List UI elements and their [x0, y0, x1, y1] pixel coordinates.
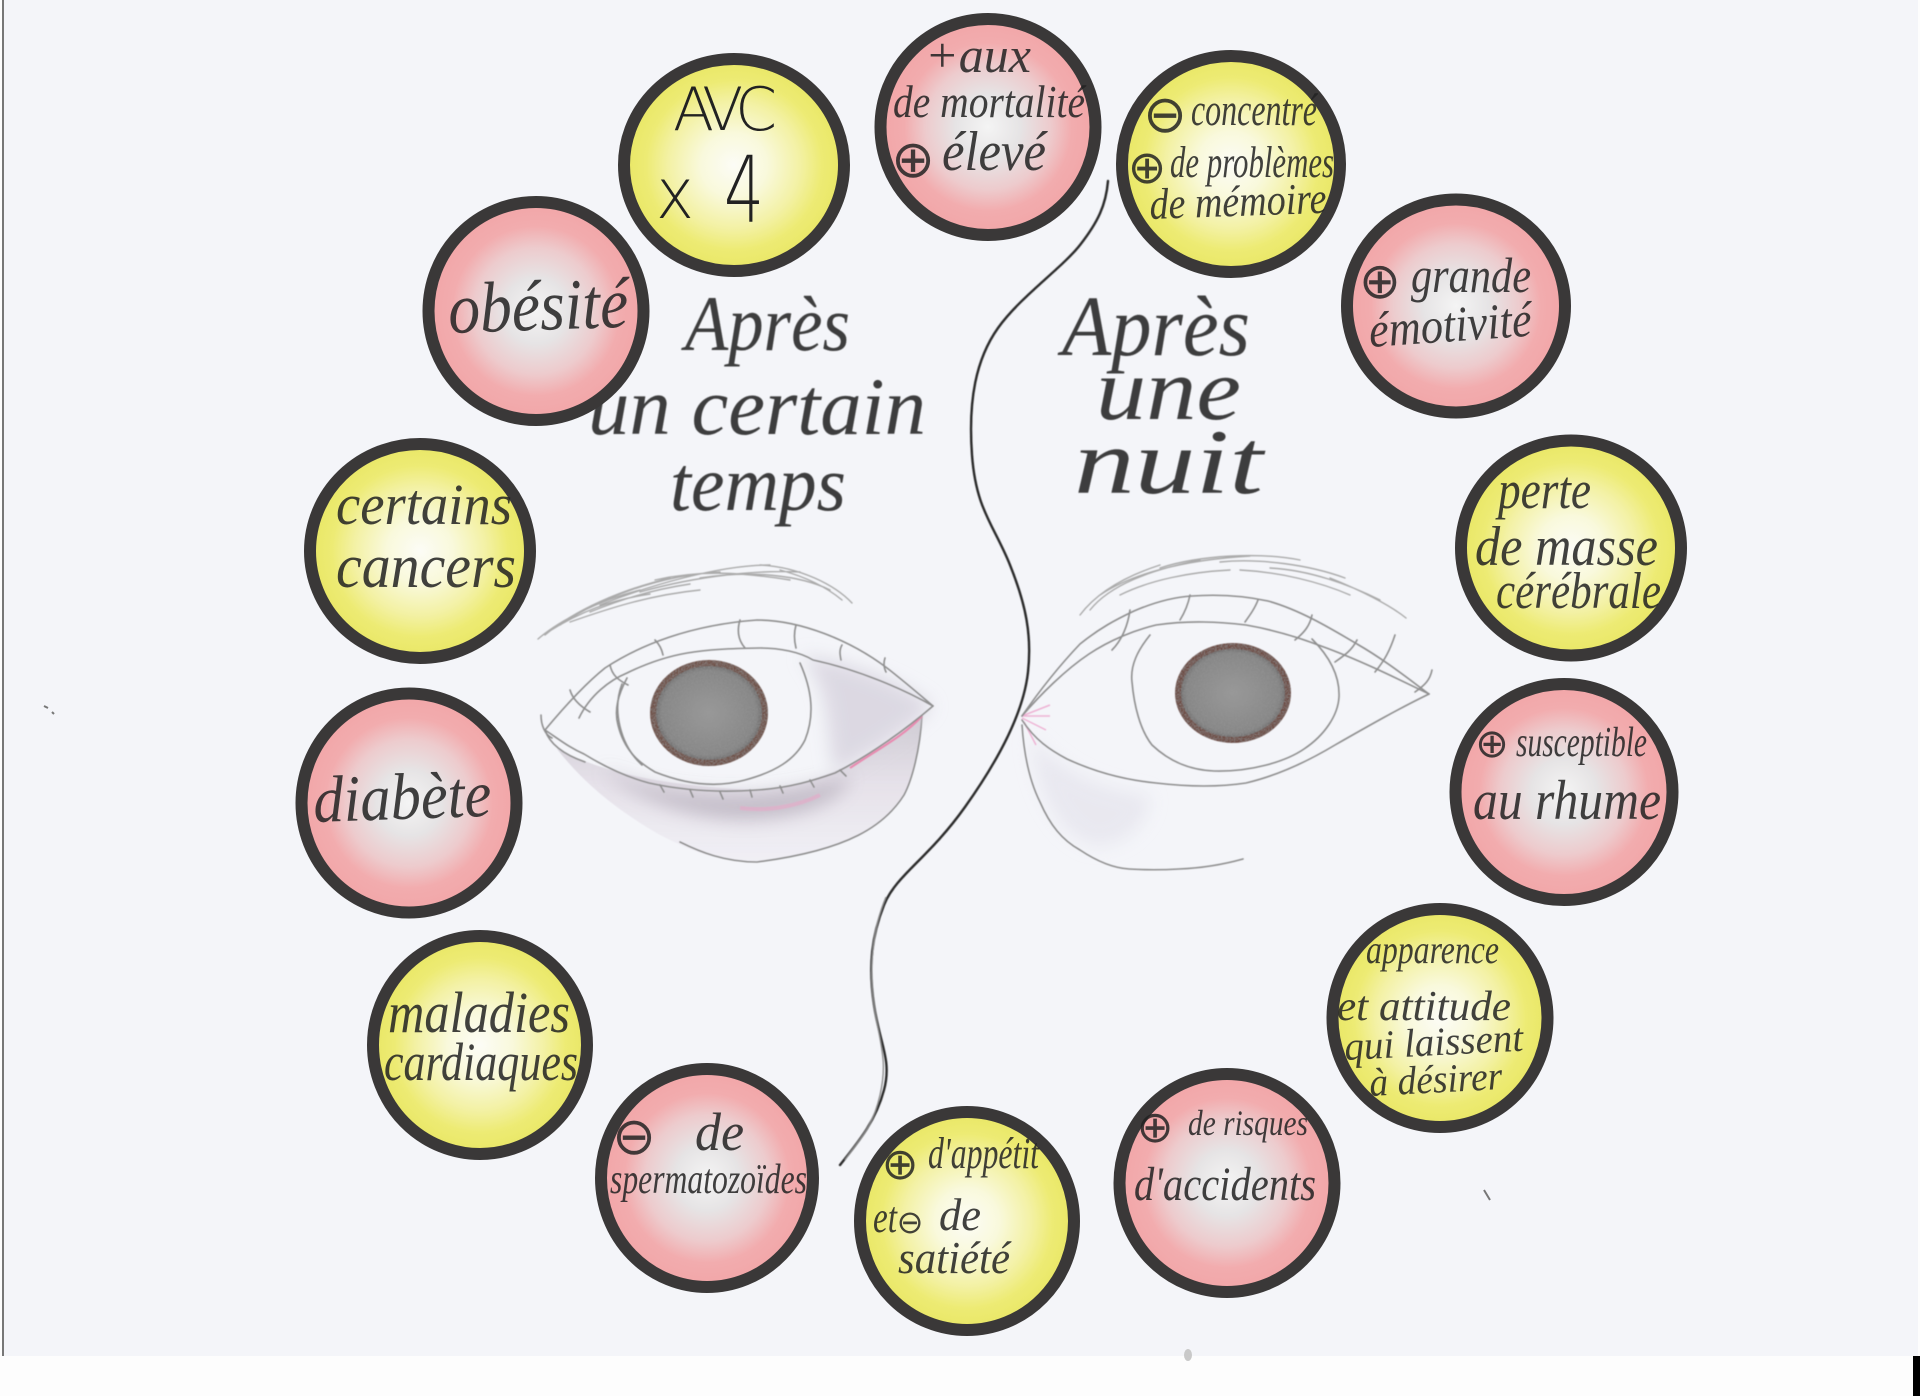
eyelid outlines	[545, 620, 933, 730]
left eye: après un certain temps	[538, 565, 933, 862]
circle: apparence et attitude qui laissent à désirer: apparence	[1366, 927, 1499, 972]
circle: plus grande émotivité: émotivité	[1367, 291, 1535, 358]
heading: après une nuit: une	[1096, 342, 1241, 439]
circle: AVC x 4: x	[656, 153, 694, 235]
eyeball outline	[616, 663, 811, 784]
circle: moins de spermatozoïdes: spermatozoïdes	[610, 1157, 807, 1203]
circle: plus d'appétit et moins de satiété: et	[873, 1193, 898, 1242]
circle: diabète: diabète	[312, 758, 492, 837]
sclera shading	[800, 655, 933, 773]
circle: plus de risques d'accidents	[1120, 1074, 1334, 1292]
circle: taux de mortalité élevé: +aux	[925, 27, 1031, 83]
circle: moins concentré, plus de problèmes de mémoire: de mémoire	[1149, 174, 1327, 229]
heading: après une nuit: Après	[1057, 278, 1250, 374]
circle: moins concentré, plus de problèmes de mémoire: de problèmes	[1170, 138, 1334, 187]
iris	[653, 663, 765, 763]
iris	[1178, 646, 1288, 740]
heading: après un certain temps: un certain	[588, 361, 926, 452]
circle: apparence et attitude qui laissent à désirer: et attitude	[1337, 984, 1511, 1030]
circle: plus de risques d'accidents: d'accidents	[1134, 1158, 1316, 1211]
circle: taux de mortalité élevé: de mortalité	[893, 76, 1087, 127]
circle: certains cancers: cancers	[336, 533, 516, 601]
circle: certains cancers	[310, 444, 530, 658]
circle: AVC x 4	[624, 59, 844, 271]
circle: plus d'appétit et moins de satiété: ⊖	[897, 1203, 923, 1241]
eyebrow	[538, 565, 852, 639]
cheek line	[1022, 725, 1243, 870]
lower lashes	[545, 730, 846, 799]
circle: AVC x 4: AVC	[673, 75, 777, 145]
circle: perte de masse cérébrale: de masse	[1475, 516, 1658, 578]
right eye: après une nuit	[1022, 556, 1432, 870]
circle: plus d'appétit et moins de satiété: de	[939, 1189, 981, 1240]
lashes	[1112, 595, 1432, 692]
pink inner corner	[1022, 705, 1050, 745]
circle: moins concentré, plus de problèmes de mémoire: ⊖	[1143, 85, 1187, 145]
circle: apparence et attitude qui laissent à désirer	[1332, 909, 1548, 1127]
eyelid outlines	[1022, 595, 1429, 716]
circle: plus grande émotivité: grande	[1411, 247, 1531, 303]
circle: diabète	[302, 694, 516, 912]
circle: moins de spermatozoïdes: de	[695, 1102, 744, 1162]
circle: plus d'appétit et moins de satiété: satiété	[898, 1232, 1012, 1283]
circle: moins concentré, plus de problèmes de mémoire	[1122, 56, 1340, 272]
eyeball outline	[1132, 635, 1339, 771]
circle: obésité	[428, 202, 644, 420]
circle: AVC x 4: 4	[724, 137, 764, 244]
circle: plus susceptible au rhume: au rhume	[1473, 770, 1661, 832]
eyebrow	[1080, 556, 1406, 618]
faint under-eye tint	[1030, 735, 1150, 846]
circle: plus de risques d'accidents: ⊕	[1137, 1102, 1173, 1153]
circle: plus de risques d'accidents: de risques	[1188, 1103, 1308, 1143]
circle: moins de spermatozoïdes	[601, 1069, 813, 1287]
red lower lid line	[850, 716, 922, 768]
circle: moins concentré, plus de problèmes de mémoire: ⊕	[1128, 140, 1166, 194]
circle: plus d'appétit et moins de satiété: d'appétit	[928, 1129, 1040, 1178]
circle: maladies cardiaques: cardiaques	[384, 1032, 578, 1092]
circle: taux de mortalité élevé	[880, 19, 1096, 235]
circle: plus susceptible au rhume: susceptible	[1516, 720, 1647, 766]
heading: après un certain temps: Après	[680, 280, 850, 367]
circle: plus grande émotivité: ⊕	[1359, 252, 1401, 310]
circle: apparence et attitude qui laissent à désirer: qui laissent	[1343, 1015, 1525, 1069]
circle: perte de masse cérébrale	[1461, 440, 1681, 656]
circle: plus grande émotivité	[1347, 200, 1565, 412]
circle: plus susceptible au rhume: ⊕	[1475, 721, 1509, 767]
circle: perte de masse cérébrale: cérébrale	[1496, 563, 1661, 620]
heading: après une nuit	[1057, 278, 1266, 513]
shadow and pink tint below the lid	[600, 768, 850, 819]
lashes	[541, 620, 886, 738]
circle: moins de spermatozoïdes: ⊖	[612, 1107, 656, 1167]
under-eye bag	[557, 716, 922, 862]
circle: plus d'appétit et moins de satiété: ⊕	[882, 1139, 918, 1190]
circle: obésité: obésité	[447, 263, 632, 349]
circle: perte de masse cérébrale: perte	[1495, 460, 1591, 520]
circle: plus susceptible au rhume	[1456, 684, 1672, 900]
circle: maladies cardiaques: maladies	[388, 980, 570, 1045]
circle: moins concentré, plus de problèmes de mémoire: concentré	[1191, 84, 1319, 135]
heading: après un certain temps	[588, 280, 926, 527]
bag outline	[680, 716, 922, 862]
circle: taux de mortalité élevé: élevé	[942, 121, 1048, 183]
heading: après un certain temps: temps	[670, 440, 846, 527]
heading: après une nuit: nuit	[1074, 411, 1266, 513]
circle: plus d'appétit et moins de satiété	[860, 1112, 1074, 1330]
circle: maladies cardiaques	[373, 936, 587, 1154]
circle: apparence et attitude qui laissent à désirer: à désirer	[1368, 1053, 1504, 1105]
central wavy dividing line	[840, 181, 1108, 1165]
circle: certains cancers: certains	[336, 472, 512, 537]
circle: taux de mortalité élevé: ⊕	[891, 130, 935, 190]
